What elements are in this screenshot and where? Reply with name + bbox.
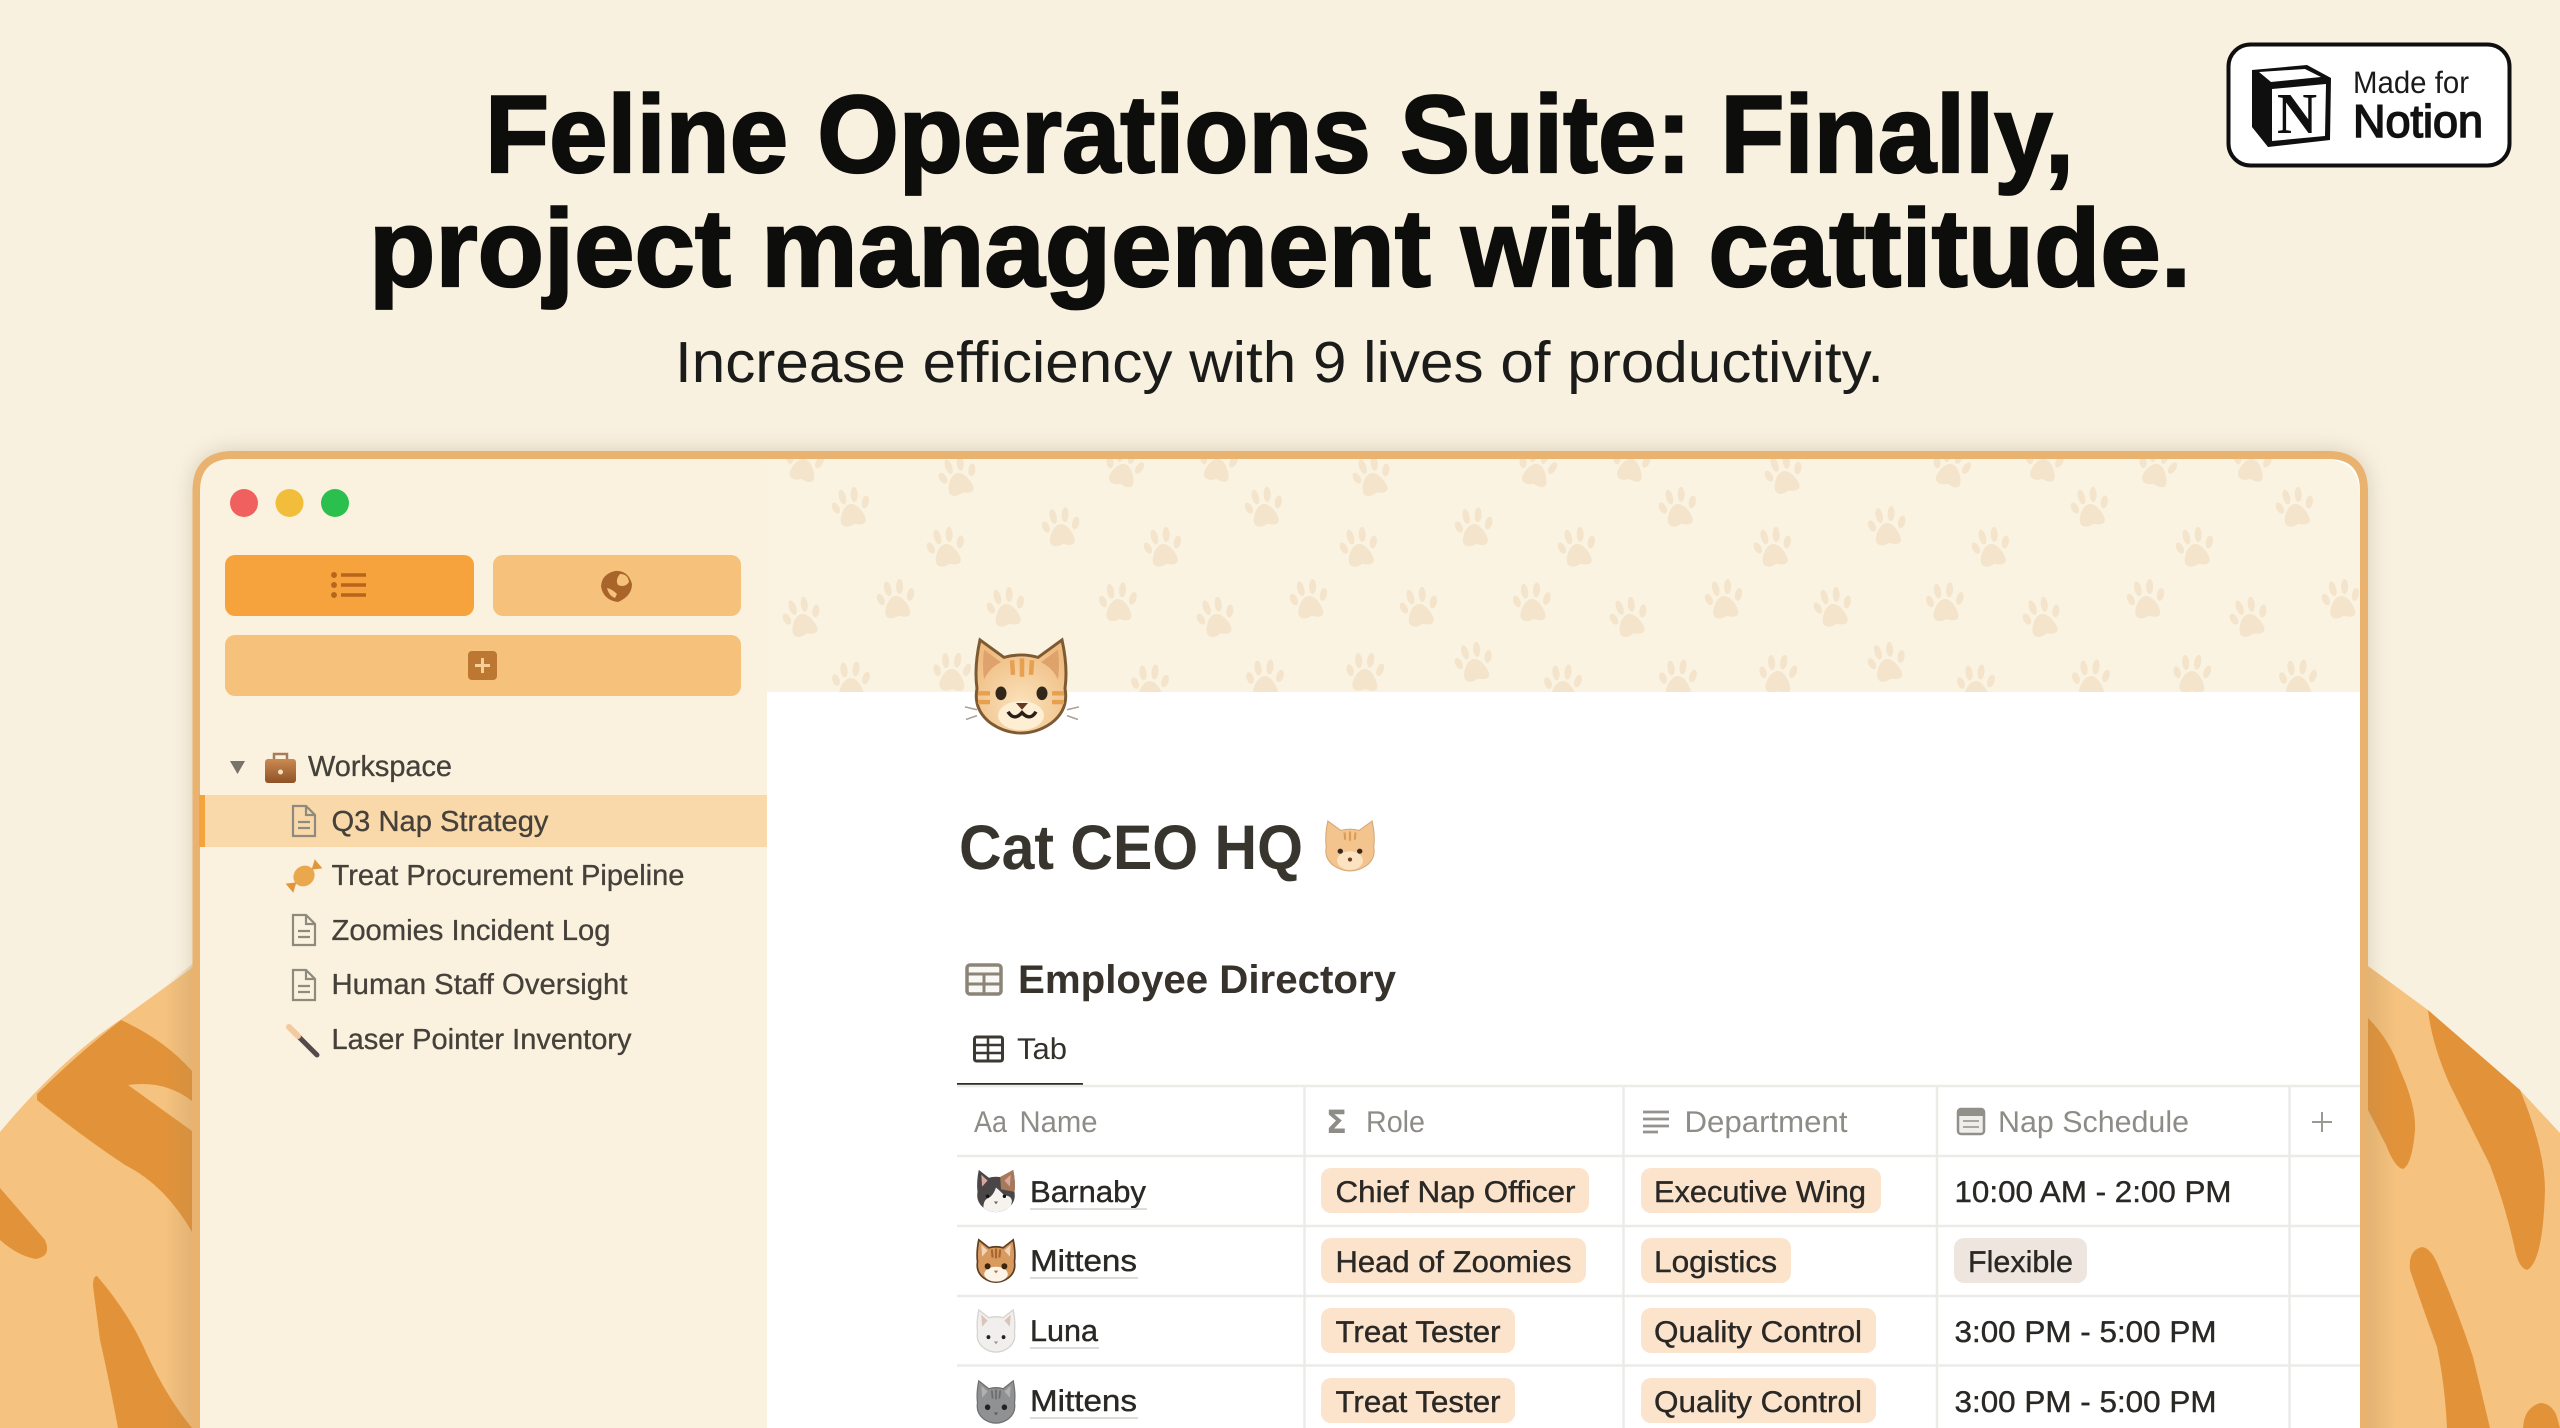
table header row: Name bbox=[1020, 1106, 1098, 1139]
decorative cat left bbox=[0, 962, 200, 1428]
table row: Barnaby bbox=[977, 1170, 1147, 1212]
banner with paw print pattern bbox=[767, 459, 2360, 692]
tab: Tab: Tab bbox=[1017, 1033, 1067, 1066]
role pill: Treat Tester bbox=[1321, 1308, 1515, 1353]
icon: page cat bbox=[965, 640, 1079, 733]
sidebar background bbox=[200, 459, 767, 1428]
title: Feline Operations Suite: Finally, bbox=[485, 73, 2074, 196]
table header row: Role bbox=[1366, 1106, 1425, 1139]
role pill: Treat Tester: Treat Tester bbox=[1336, 1316, 1500, 1349]
department pill: Quality Control second bbox=[1641, 1378, 1876, 1423]
nav row: Human Staff Oversight: Human Staff Oversight bbox=[332, 969, 628, 1001]
selected nav row: Q3 Nap Strategy bbox=[199, 795, 767, 847]
tab: Tab bbox=[957, 1033, 1083, 1087]
table grid bbox=[957, 1086, 2360, 1428]
badge: made for notion: N bbox=[2277, 81, 2317, 146]
department pill: Quality Control bbox=[1641, 1308, 1876, 1353]
department pill: Logistics: Logistics bbox=[1654, 1246, 1777, 1279]
icon: title cat bbox=[1326, 821, 1374, 871]
selected nav row: Q3 Nap Strategy: Q3 Nap Strategy bbox=[332, 806, 549, 838]
title bbox=[369, 73, 2191, 310]
role pill: Chief Nap Officer bbox=[1321, 1168, 1589, 1213]
table header row: Nap Schedule bbox=[1998, 1106, 2189, 1139]
table row: Mittens orange: Mittens bbox=[1030, 1245, 1137, 1278]
department pill: Executive Wing: Executive Wing bbox=[1654, 1176, 1866, 1209]
table row: Mittens orange bbox=[977, 1240, 1138, 1282]
traffic lights bbox=[230, 489, 349, 517]
table header row: Σ bbox=[1326, 1103, 1347, 1141]
section heading: Employee Directory: Employee Directory bbox=[1018, 958, 1397, 1002]
nap schedule: Luna: 3:00 PM - 5:00 PM bbox=[1954, 1316, 2216, 1349]
workspace tree heading bbox=[230, 751, 452, 783]
table row: Mittens grey bbox=[977, 1381, 1138, 1423]
page title: Cat CEO HQ bbox=[959, 813, 1303, 883]
nap schedule pill: Flexible bbox=[1954, 1238, 2087, 1283]
role pill: Chief Nap Officer: Chief Nap Officer bbox=[1336, 1176, 1576, 1209]
table header row: Department bbox=[1684, 1106, 1848, 1139]
table row: Luna: Luna bbox=[1030, 1315, 1098, 1348]
role pill: Head of Zoomies bbox=[1321, 1238, 1586, 1283]
department pill: Quality Control: Quality Control bbox=[1654, 1316, 1862, 1349]
decorative cat right bbox=[2360, 960, 2560, 1428]
table row: Luna bbox=[977, 1310, 1099, 1352]
nap schedule pill: Flexible: Flexible bbox=[1968, 1246, 2073, 1279]
role pill: Head of Zoomies: Head of Zoomies bbox=[1336, 1246, 1572, 1279]
badge: made for notion bbox=[2228, 44, 2510, 166]
role pill: Treat Tester second bbox=[1321, 1378, 1515, 1423]
nav row: Laser Pointer Inventory: Laser Pointer Inventory bbox=[332, 1024, 632, 1056]
department pill: Quality Control second: Quality Control bbox=[1654, 1386, 1862, 1419]
badge: made for notion: Made for bbox=[2353, 65, 2469, 100]
table row: Barnaby: Barnaby bbox=[1030, 1176, 1146, 1209]
title: project management with cattitude. bbox=[369, 187, 2191, 310]
sidebar button: globe bbox=[493, 555, 741, 616]
badge: made for notion: Notion bbox=[2353, 95, 2483, 147]
nav row: Zoomies Incident Log: Zoomies Incident Log bbox=[332, 915, 610, 947]
department pill: Executive Wing bbox=[1641, 1168, 1881, 1213]
role pill: Treat Tester second: Treat Tester bbox=[1336, 1386, 1500, 1419]
app window bbox=[196, 438, 2364, 1428]
table header row bbox=[974, 1103, 2332, 1141]
table header row: Aa bbox=[974, 1106, 1007, 1139]
sidebar button: add bbox=[225, 635, 741, 696]
nap schedule: Mittens grey: 3:00 PM - 5:00 PM bbox=[1954, 1386, 2216, 1419]
table row: Mittens grey: Mittens bbox=[1030, 1385, 1137, 1418]
department pill: Logistics bbox=[1641, 1238, 1791, 1283]
window shadow bbox=[193, 451, 2368, 1428]
subtitle: Increase efficiency with 9 lives of productivity. bbox=[675, 330, 1884, 395]
nap schedule: Barnaby: 10:00 AM - 2:00 PM bbox=[1954, 1176, 2232, 1209]
sidebar button: list bbox=[225, 555, 474, 616]
workspace tree heading: Workspace bbox=[308, 751, 452, 783]
nav row: Treat Procurement Pipeline: Treat Procurement Pipeline bbox=[332, 860, 684, 892]
